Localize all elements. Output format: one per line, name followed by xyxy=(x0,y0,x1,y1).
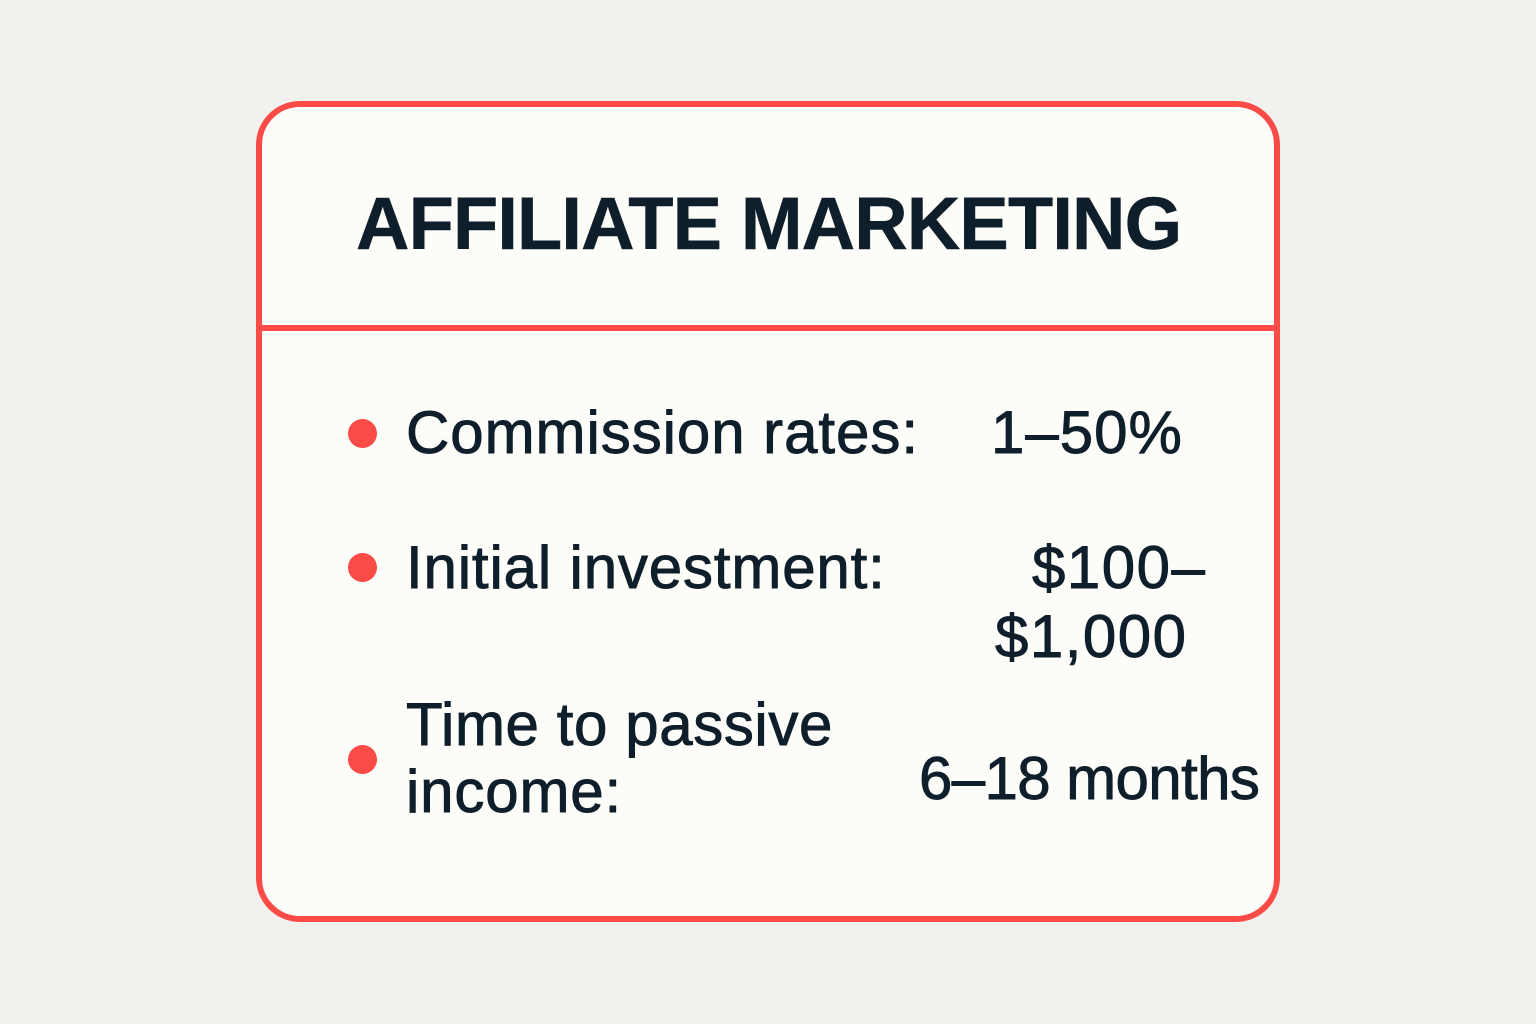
bullet: time to passive income xyxy=(348,745,377,774)
label: commission rates: Commission rates: xyxy=(406,399,919,466)
value: time to passive income: 6–18 months xyxy=(919,745,1259,812)
bullet: initial investment xyxy=(348,553,377,582)
value: initial investment: $1,000 xyxy=(995,603,1188,670)
card frame xyxy=(256,101,1280,922)
panel: affiliate marketing card xyxy=(256,101,1280,922)
label: time to passive income: Time to passive xyxy=(406,691,833,758)
label: time to passive income: income: xyxy=(406,758,622,825)
value: initial investment xyxy=(995,534,1206,670)
value: initial investment: $100– xyxy=(1032,534,1206,601)
bullet: commission rates xyxy=(348,419,377,448)
label: time to passive income xyxy=(406,691,833,825)
value: commission rates: 1–50% xyxy=(991,399,1183,466)
header divider xyxy=(260,325,1276,331)
label: initial investment: Initial investment: xyxy=(406,534,886,601)
title: AFFILIATE MARKETING xyxy=(356,182,1181,265)
